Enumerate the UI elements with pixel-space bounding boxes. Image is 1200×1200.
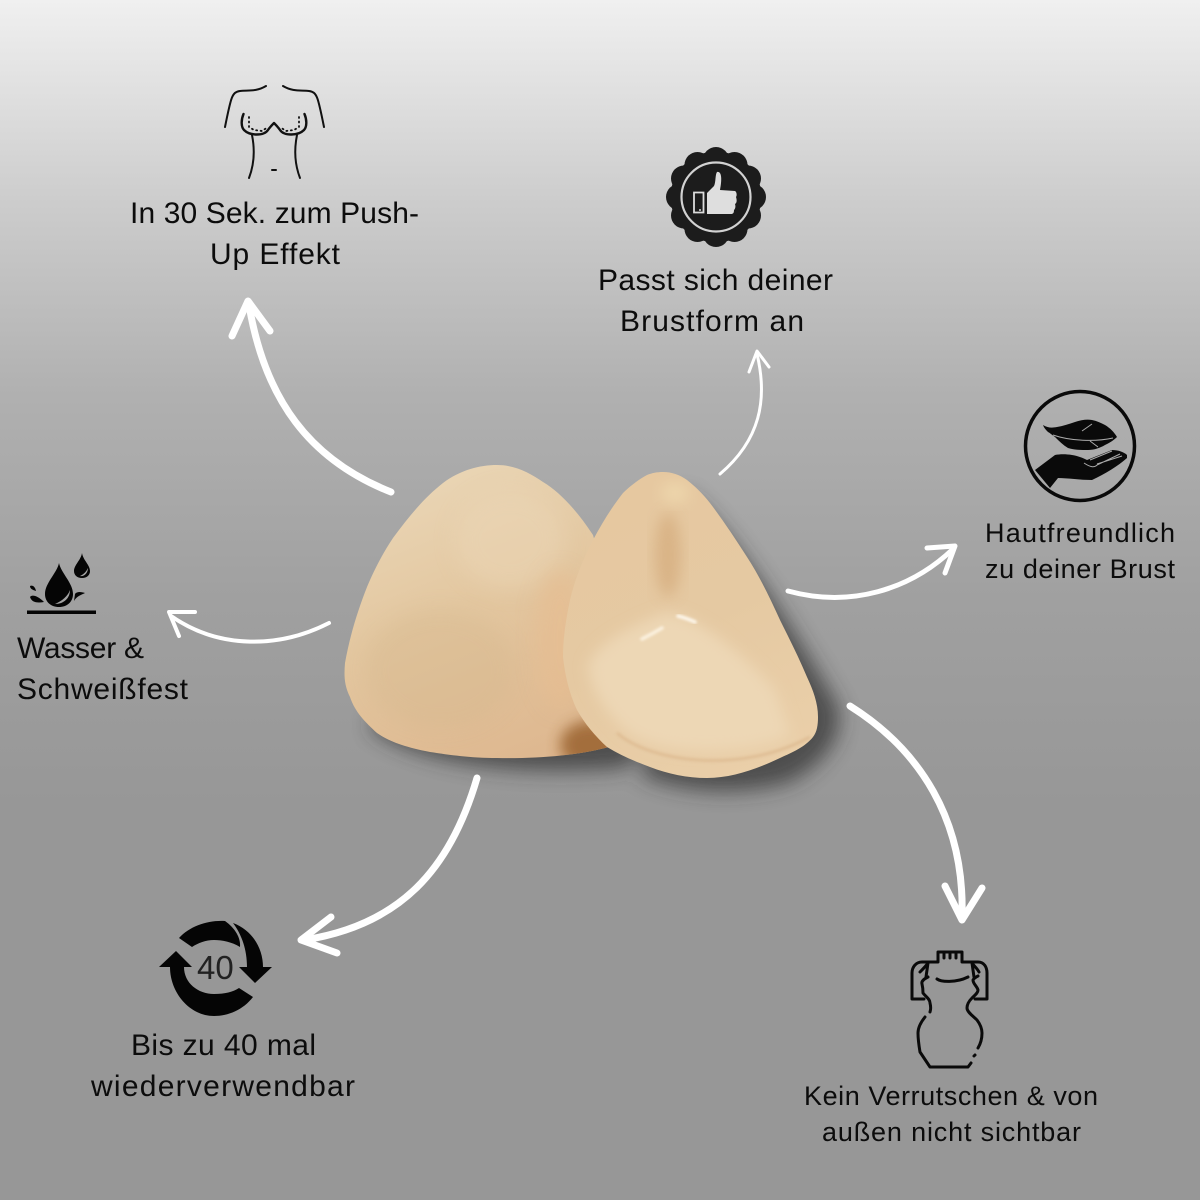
arrow: to skin-friendly [788,546,955,597]
icon: recycle 40 [159,921,272,1016]
text: push-up: Up Effekt [210,238,341,271]
text: breast shape: Passt sich deiner [598,264,833,297]
text: push-up [130,197,419,271]
left pad [344,465,608,758]
text: waterproof [17,632,189,706]
arrow: to no slipping [850,706,982,920]
product: two silicone push-up pads [345,465,840,791]
icon: torso [225,86,324,178]
text: waterproof: Schweißfest [17,673,189,706]
text: skin-friendly [985,518,1175,584]
icon: thumbs-up badge [666,147,766,247]
arrow: to push-up effect [232,301,391,492]
arrow: to reusable [301,778,477,953]
text: breast shape [598,264,833,338]
arrow: to breast shape [720,351,769,474]
pad shadows [368,490,840,791]
icon: dress form [912,952,987,1067]
text: reusable: Bis zu 40 mal [131,1029,316,1062]
text: waterproof: Wasser & [17,632,144,665]
text: reusable: wiederverwendbar [90,1070,355,1103]
icon: recycle 40: 40 [197,949,234,986]
text: skin-friendly: Hautfreundlich [985,518,1175,548]
icon: leaf over hand [1026,392,1134,500]
arrow: to waterproof [169,612,329,642]
text: reusable [90,1029,355,1103]
text: no slipping: Kein Verrutschen & von [804,1081,1098,1111]
text: no slipping [804,1081,1098,1147]
icon: water drops [27,553,96,614]
text: skin-friendly: zu deiner Brust [985,554,1175,584]
right pad [563,472,818,778]
text: push-up: In 30 Sek. zum Push- [130,197,419,230]
text: no slipping: außen nicht sichtbar [822,1117,1081,1147]
text: breast shape: Brustform an [620,305,804,338]
